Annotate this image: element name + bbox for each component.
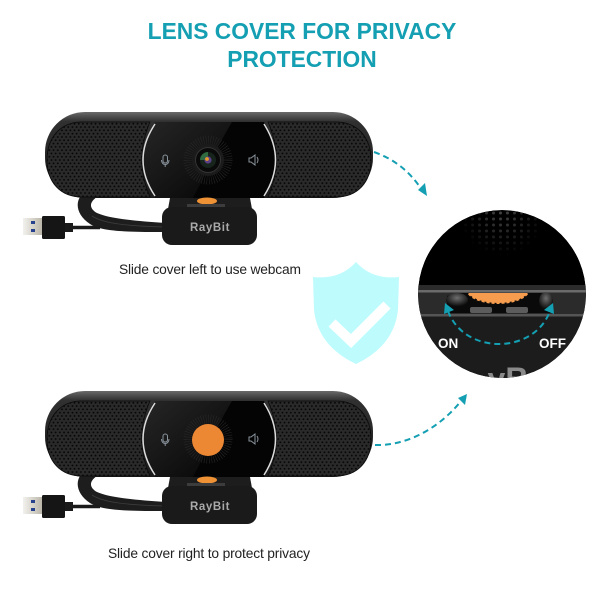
label ON: ON <box>438 336 458 351</box>
zoom detail circle <box>418 210 586 378</box>
arrow to zoom detail (top) <box>374 152 427 196</box>
webcam: lens uncovered <box>23 112 373 245</box>
lens sunburst <box>188 419 228 459</box>
usb plug <box>23 495 73 518</box>
title: LENS COVER FOR PRIVACY <box>148 18 456 44</box>
caption: use webcam: Slide cover left to use webcam <box>119 262 301 277</box>
orange cover knob <box>468 293 528 304</box>
centre glass panel <box>142 122 276 198</box>
slider slot <box>446 293 553 313</box>
clip with brand <box>162 207 257 245</box>
left speaker grille <box>47 122 150 197</box>
orange lens cover <box>192 424 224 456</box>
on-off arc arrow <box>444 303 554 344</box>
label OFF: OFF <box>539 336 566 351</box>
speaker icon <box>249 434 258 444</box>
right speaker grille <box>268 401 371 476</box>
webcam: lens covered <box>23 391 373 524</box>
left speaker grille <box>47 401 150 476</box>
slider rail <box>418 285 586 315</box>
slider mount <box>168 198 252 209</box>
camera body <box>45 391 373 477</box>
right speaker grille <box>268 122 371 197</box>
slider mount <box>168 476 252 488</box>
caption: protect privacy: Slide cover right to protect privacy <box>108 546 310 561</box>
arrow to zoom detail (bottom) <box>375 394 467 445</box>
speaker dots fading <box>464 212 537 250</box>
shield icon <box>313 262 399 364</box>
speaker icon <box>249 155 258 165</box>
title line 2: PROTECTION <box>227 46 377 72</box>
lower housing <box>418 316 586 378</box>
partial brand letters: yB <box>488 361 528 397</box>
lens <box>192 144 224 176</box>
usb cable <box>72 197 166 232</box>
lens sunburst <box>188 140 228 180</box>
clip with brand: RayBit <box>190 501 230 513</box>
usb plug <box>23 216 73 239</box>
microphone icon <box>162 434 169 446</box>
usb cable <box>72 476 166 511</box>
clip with brand <box>162 486 257 524</box>
clip with brand: RayBit <box>190 222 230 234</box>
microphone icon <box>162 155 169 167</box>
centre glass panel <box>142 401 276 477</box>
camera body <box>45 112 373 198</box>
